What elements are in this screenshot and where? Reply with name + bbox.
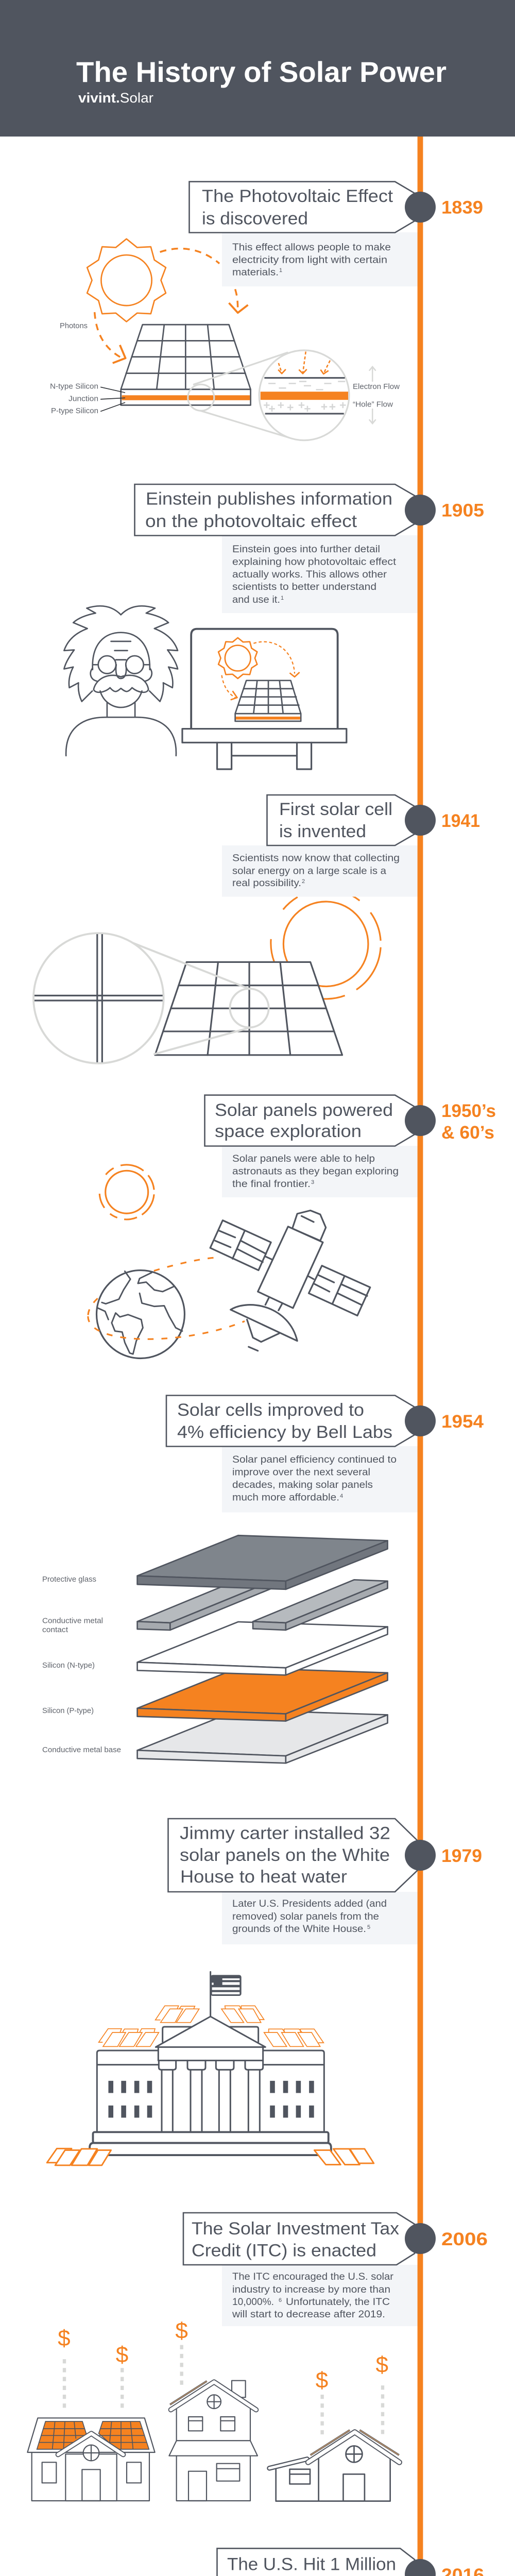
icon: dollar signs: $ xyxy=(58,2326,71,2351)
label: Conductive metal contact: Conductive metal xyxy=(42,1617,103,1625)
arrow: hole flow xyxy=(369,409,375,423)
leader lines xyxy=(100,387,125,411)
callout: 2016: The U.S. Hit 1 Million xyxy=(227,2554,396,2574)
icon: presentation screen xyxy=(182,629,347,769)
illustration: first solar cell xyxy=(33,895,381,1063)
section 1954 description: 4 xyxy=(340,1493,343,1499)
illustration: solar cell layers xyxy=(138,1535,388,1763)
section 1979 description xyxy=(222,1892,418,1944)
section 1950s description xyxy=(222,1146,418,1197)
section 2006 description xyxy=(222,2265,418,2326)
magnifier: cell close-up xyxy=(33,933,269,1063)
timeline dot xyxy=(405,1405,436,1436)
arrow: photons to panel left xyxy=(95,312,126,363)
icon: earth xyxy=(97,1270,184,1358)
callout: 1941 xyxy=(267,795,480,845)
section 1950s description: astronauts as they began exploring xyxy=(232,1166,399,1177)
illustration: photovoltaic effect diagram xyxy=(87,239,375,440)
timeline dot xyxy=(405,495,436,526)
building xyxy=(97,2016,324,2131)
section 1954 description: much more affordable. xyxy=(232,1493,339,1503)
section 1839 description: 1 xyxy=(279,267,282,274)
callout: 1950s and 60s xyxy=(205,1095,496,1146)
timeline line xyxy=(418,137,423,2576)
icon: house three xyxy=(269,2430,400,2501)
lower building and ground panels xyxy=(47,2081,374,2165)
illustration: White House with solar panels xyxy=(47,1972,374,2165)
illustration: Einstein and presentation screen xyxy=(64,606,347,769)
icon: dollar signs: $ xyxy=(116,2342,128,2367)
timeline dot xyxy=(405,192,436,223)
houses one and two xyxy=(27,2381,258,2501)
section 1905 description xyxy=(222,535,418,613)
orbit path in front of earth xyxy=(88,1316,245,1339)
icon: sun with ring xyxy=(99,1165,154,1219)
section 1979 description: removed) solar panels from the xyxy=(232,1911,379,1922)
icon: house two xyxy=(169,2381,258,2501)
year: 1979 xyxy=(441,1846,482,1866)
section 1839 description: materials. xyxy=(232,267,279,278)
section 1905 description: 1 xyxy=(281,595,284,601)
section 1950s description: the final frontier. xyxy=(232,1179,311,1190)
section 2006 description: industry to increase by more than xyxy=(232,2284,390,2295)
section 1954 description: Solar panel efficiency continued to xyxy=(232,1454,397,1465)
callout: 1905: Einstein publishes information xyxy=(146,489,392,509)
section 1839 description: This effect allows people to make xyxy=(232,242,391,253)
illustration: houses with savings xyxy=(27,2345,400,2501)
icon: Einstein xyxy=(64,606,178,756)
year: & 60’s xyxy=(441,1123,494,1143)
section 2006 description: 10,000%. xyxy=(232,2297,274,2308)
callout: 1905 xyxy=(135,484,484,536)
section 1905 description: Einstein goes into further detail xyxy=(232,544,380,555)
label: Conductive metal contact xyxy=(42,1617,103,1634)
label: N-type Silicon: N-type Silicon xyxy=(50,382,98,391)
callout: 1839 xyxy=(190,182,483,233)
section 1905 description: explaining how photovoltaic effect xyxy=(232,556,397,568)
callout: 1979 xyxy=(168,1819,482,1892)
solar panel xyxy=(121,325,251,405)
layer: silicon n-type xyxy=(138,1622,388,1675)
callout: 1950s and 60s: Solar panels powered xyxy=(215,1100,393,1120)
solar panels on ground xyxy=(47,2148,374,2165)
callout: 1839: The Photovoltaic Effect xyxy=(202,187,393,206)
year: 1954 xyxy=(441,1412,484,1432)
arrow: electron flow xyxy=(369,367,375,381)
arrow: photons to panel right xyxy=(160,248,248,313)
timeline dot xyxy=(405,1105,436,1136)
year: 1839 xyxy=(441,198,483,217)
section 1905 description: scientists to better understand xyxy=(232,582,376,592)
upper building and roof panels xyxy=(97,1972,324,2131)
label: Hole Flow: “Hole” Flow xyxy=(353,401,393,409)
label: P-type Silicon: P-type Silicon xyxy=(51,407,98,415)
title: The History of Solar Power xyxy=(76,56,447,88)
section 1979 description: grounds of the White House. xyxy=(232,1924,366,1935)
section 1941 description: 2 xyxy=(302,878,305,885)
callout: 2006: The Solar Investment Tax xyxy=(192,2219,399,2239)
section 1941 description: solar energy on a large scale is a xyxy=(232,866,386,877)
section 1941 description xyxy=(222,845,418,896)
section 1954 description: decades, making solar panels xyxy=(232,1480,373,1490)
section 1941 description: real possibility. xyxy=(232,878,301,889)
label: Photons: Photons xyxy=(60,322,88,330)
steps xyxy=(90,2132,331,2155)
section 1839 description: electricity from light with certain xyxy=(232,255,387,266)
label: Conductive metal contact: contact xyxy=(42,1626,68,1634)
magnifier: junction close-up xyxy=(188,350,349,440)
section 1839 description xyxy=(222,232,418,286)
windows xyxy=(108,2081,314,2117)
label: Silicon N-type: Silicon (N-type) xyxy=(42,1662,95,1670)
year: 2006 xyxy=(441,2229,488,2249)
layer: conductive metal base xyxy=(138,1710,388,1763)
section 2006 description: will start to decrease after 2019. xyxy=(232,2309,385,2320)
section 2006 description: Unfortunately, the ITC xyxy=(286,2297,390,2308)
callout: 1839: is discovered xyxy=(202,209,308,229)
callout: 1979: Jimmy carter installed 32 xyxy=(180,1824,390,1843)
icon: satellite xyxy=(210,1210,370,1351)
label: Protective glass: Protective glass xyxy=(42,1575,96,1584)
year: 1950’s xyxy=(441,1101,496,1121)
section 1979 description: Later U.S. Presidents added (and xyxy=(232,1899,387,1909)
illustration: space exploration xyxy=(88,1165,370,1358)
dotted lines xyxy=(64,2345,383,2436)
icon: sun xyxy=(87,239,166,321)
label: Conductive metal base: Conductive metal base xyxy=(42,1746,121,1754)
section 1954 description: improve over the next several xyxy=(232,1467,370,1478)
solar panel xyxy=(155,962,342,1055)
section 1954 description xyxy=(222,1446,418,1513)
icon: dollar signs: $ xyxy=(375,2352,388,2378)
section 1941 description: Scientists now know that collecting xyxy=(232,853,400,863)
section 2006 description: The ITC encouraged the U.S. solar xyxy=(232,2272,394,2282)
label: Silicon P-type: Silicon (P-type) xyxy=(42,1707,94,1715)
callout: 1979: solar panels on the White xyxy=(180,1845,390,1865)
timeline dot xyxy=(405,2559,436,2576)
layer: protective glass xyxy=(138,1535,388,1589)
year: 1905 xyxy=(441,501,484,520)
timeline dot xyxy=(405,805,436,836)
orbit path behind earth xyxy=(88,1258,214,1316)
logo: vivint.Solar xyxy=(78,90,153,106)
icon: flag xyxy=(211,1972,242,2016)
solar panels on roof xyxy=(99,2006,323,2046)
callout: 1954 xyxy=(166,1395,484,1447)
section 1950s description: Solar panels were able to help xyxy=(232,1154,375,1164)
icon: sun with rings xyxy=(271,895,381,999)
section 1979 description: 5 xyxy=(367,1924,370,1930)
callout: 2006: Credit (ITC) is enacted xyxy=(192,2241,376,2261)
year: 1941 xyxy=(441,811,480,831)
callout: 1954: 4% efficiency by Bell Labs xyxy=(177,1422,392,1442)
icon: house one xyxy=(27,2418,155,2501)
icon: dollar signs xyxy=(58,2318,388,2393)
section 2006 description: 6 xyxy=(279,2297,282,2303)
callout: 1941: First solar cell xyxy=(279,800,392,819)
callout: 2006 xyxy=(183,2213,488,2265)
layer: silicon p-type xyxy=(138,1668,388,1721)
callout: 1941: is invented xyxy=(279,822,366,841)
header banner xyxy=(0,0,515,137)
timeline dot xyxy=(405,1840,436,1871)
section 1950s description: 3 xyxy=(311,1179,314,1185)
layer: conductive metal contacts xyxy=(138,1580,388,1630)
callout: 2016 xyxy=(217,2548,484,2576)
label: Electron Flow: Electron Flow xyxy=(353,383,400,391)
icon: dollar signs: $ xyxy=(316,2368,328,2393)
callout: 1954: Solar cells improved to xyxy=(177,1400,364,1420)
year xyxy=(441,1101,496,1143)
label: Junction: Junction xyxy=(68,395,98,403)
callout: 1950s and 60s: space exploration xyxy=(215,1122,362,1141)
section 1905 description: actually works. This allows other xyxy=(232,569,387,580)
callout: 1979: House to heat water xyxy=(180,1867,347,1887)
callout: 1905: on the photovoltaic effect xyxy=(145,512,357,531)
icon: dollar signs: $ xyxy=(175,2318,188,2344)
section 1905 description: and use it. xyxy=(232,595,280,605)
timeline dot xyxy=(405,2223,436,2254)
